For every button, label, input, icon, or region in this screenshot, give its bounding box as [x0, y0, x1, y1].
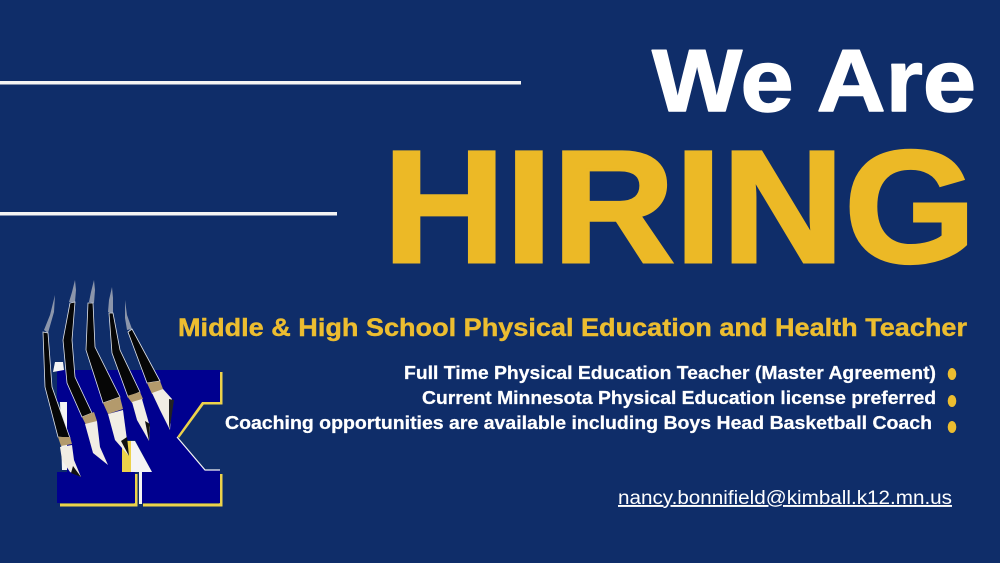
contact email: nancy.bonnifield@kimball.k12.mn.us [618, 488, 952, 509]
requirement: coaching: Coaching opportunities are available including Boys Head Basketball Coach [225, 412, 932, 433]
claw 2 [63, 280, 108, 465]
letter K [57, 370, 220, 503]
list bullets [948, 368, 956, 433]
claw 3 [86, 280, 129, 456]
requirement: full time: Full Time Physical Education Teacher (Master Agreement) [404, 362, 936, 383]
claw 5 [125, 300, 174, 430]
claw 1 [43, 295, 81, 477]
claw 4 [108, 287, 150, 441]
job title: Middle & High School Physical Education and Health Teacher [178, 314, 967, 342]
letter K shadow [60, 372, 221, 505]
logo: K with claw marks [43, 280, 221, 505]
K white and yellow inner edges [122, 441, 131, 472]
heading: HIRING: HIRING [383, 117, 976, 296]
requirement: license: Current Minnesota Physical Education license preferred [422, 387, 936, 408]
requirements list [225, 362, 936, 433]
heading: We Are: We Are [652, 31, 976, 130]
